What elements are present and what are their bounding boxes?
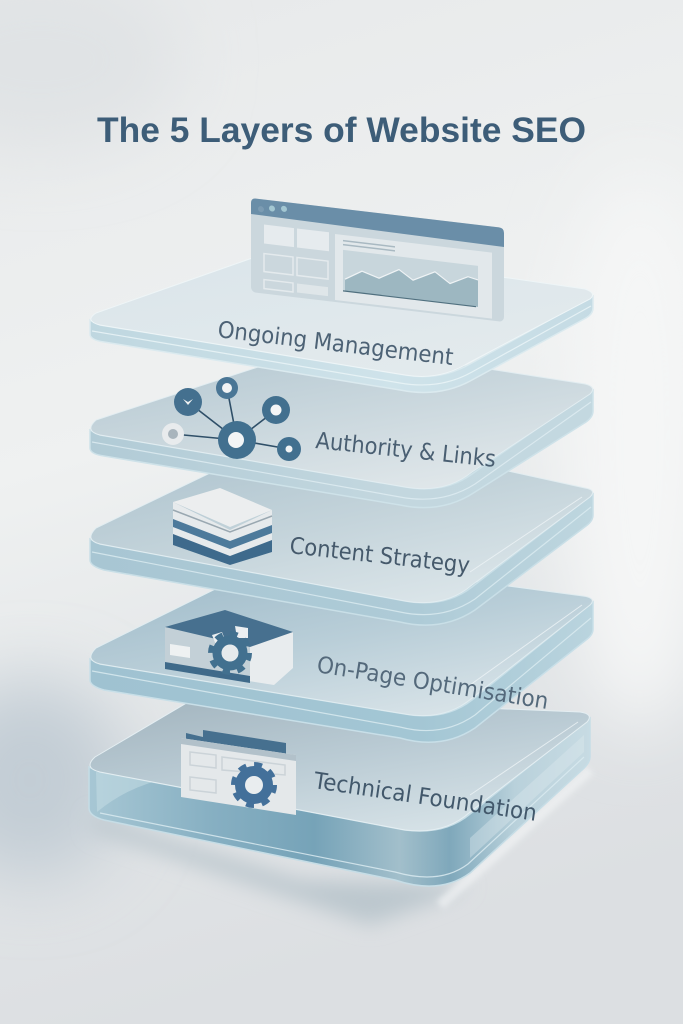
- icon: content stack: [173, 488, 272, 565]
- layer 4: on-page optimisation: [90, 558, 593, 742]
- layer 3 glass side: [90, 494, 593, 625]
- layer 1 glass side: [90, 296, 593, 392]
- icon: browser dashboard window: [251, 198, 504, 322]
- layer 1 glass top: [91, 247, 593, 376]
- layer 3: content strategy: [90, 428, 593, 625]
- layer 1: ongoing management: [90, 198, 593, 392]
- layer 3 glass top: [91, 428, 593, 603]
- icon: technical page with gear: [181, 730, 296, 815]
- layer 4 glass top: [91, 558, 592, 716]
- layer 2: authority and links: [90, 345, 593, 508]
- layer 5 glass side: [89, 718, 590, 886]
- label: ongoing management: Ongoing Management: [216, 317, 455, 371]
- layer 4 glass side: [90, 602, 593, 742]
- label: technical foundation: Technical Foundation: [311, 768, 539, 827]
- layer 2 glass top: [91, 345, 593, 489]
- icon: on-page stack with gear: [165, 610, 293, 685]
- label: authority and links: Authority & Links: [314, 428, 497, 473]
- title: The 5 Layers of Website SEO: [97, 111, 586, 150]
- layer 5: technical foundation: [89, 697, 590, 886]
- label: on-page optimisation: On-Page Optimisation: [315, 652, 550, 715]
- icon: link network: [162, 377, 301, 461]
- label: content strategy: Content Strategy: [288, 533, 471, 579]
- layer 5 glass top: [90, 697, 589, 831]
- layer 2 glass side: [90, 390, 593, 508]
